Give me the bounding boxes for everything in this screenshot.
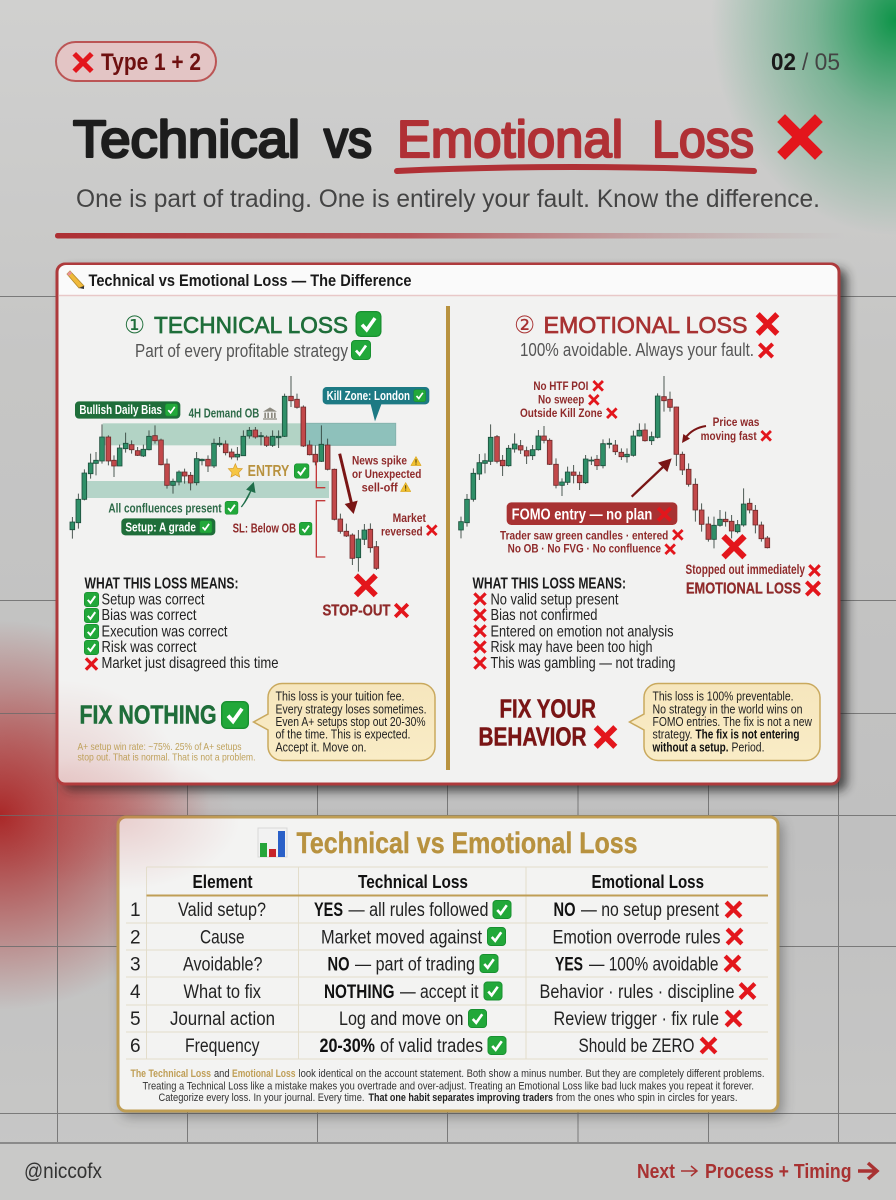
badge: Type 1 + 2: Type 1 + 2 [101, 49, 201, 76]
column: emotional loss [459, 311, 820, 760]
label: no setup checks [520, 379, 617, 420]
table note: Categorize every loss. In your journal. Every time. [158, 1092, 364, 1104]
row 6: frequency: of valid trades [380, 1036, 483, 1057]
brackets: stop distance [316, 462, 325, 557]
label: FOMO entry: FOMO entry — no plan [512, 506, 652, 523]
column: technical loss [70, 311, 437, 764]
panel: comparison table [0, 750, 783, 1117]
callout: 100% preventable: No strategy in the world wins on [652, 702, 803, 716]
callout: 100% preventable: FOMO entries. The fix is not a new [652, 715, 813, 729]
zone: kill zone london [305, 423, 396, 445]
badge: Type 1 + 2 [56, 42, 216, 81]
row 1: valid setup: YES [314, 900, 343, 921]
column divider [446, 306, 450, 770]
table note: Emotional Loss [232, 1068, 296, 1080]
title [73, 111, 819, 171]
row 2: cause [130, 927, 742, 948]
title: Technical [73, 111, 300, 169]
list: what this loss means (emotional): WHAT THIS LOSS MEANS: [472, 576, 626, 592]
row 1: valid setup: Valid setup? [178, 900, 266, 921]
table header row [192, 871, 704, 892]
list: what this loss means (technical) [84, 576, 279, 672]
label: trader description: Trader saw green candles · entered [500, 528, 668, 542]
callout: tuition fee: Accept it. Move on. [276, 740, 366, 754]
list: what this loss means (technical): Risk was correct [102, 639, 197, 656]
callout: tuition fee: Every strategy loses sometimes. [276, 702, 426, 716]
label: entry [228, 463, 309, 480]
row 1: valid setup: — no setup present [581, 900, 720, 921]
list: what this loss means (technical): Bias was correct [102, 607, 197, 624]
row 6: frequency [130, 1036, 716, 1057]
label: stopped out: EMOTIONAL LOSS [686, 580, 801, 598]
row 1: valid setup: 1 [130, 900, 141, 921]
panel heading: Technical vs Emotional Loss — The Difference [88, 271, 412, 290]
row 4: what to fix [130, 982, 755, 1003]
label: news spike: sell-off [362, 481, 398, 495]
note: win rate: A+ setup win rate: ~75%. 25% of A+ setups [78, 741, 242, 753]
subheading: Part of every profitable strategy [135, 341, 348, 361]
row 5: journal action: Journal action [170, 1009, 275, 1030]
candlesticks [459, 376, 770, 548]
label: news spike: News spike [352, 454, 407, 468]
zone: lower entry area [87, 481, 329, 498]
row 4: what to fix: 4 [130, 982, 141, 1003]
row 5: journal action: 5 [130, 1009, 141, 1030]
subheading: 100% avoidable. Always your fault. [520, 340, 754, 360]
callout: tuition fee: This loss is your tuition fee. [276, 690, 404, 704]
verdict: fix your behavior: FIX YOUR [500, 694, 596, 724]
icon: star [228, 464, 242, 477]
row 5: journal action [130, 1009, 741, 1030]
row 6: frequency: Should be ZERO [578, 1036, 694, 1057]
panel heading [59, 265, 837, 296]
table note: look identical on the account statement. Both show a minus number. But they are completely different problems. [298, 1068, 764, 1080]
label: news spike [352, 454, 421, 495]
note: win rate: stop out. That is normal. That is not a problem. [78, 752, 256, 764]
candlesticks [70, 376, 379, 572]
row 3: avoidable: YES [555, 954, 583, 976]
row 2: cause: 2 [130, 928, 141, 948]
footer: next link: Next [637, 1161, 675, 1183]
footer: next link [637, 1161, 877, 1183]
row 4: what to fix: What to fix [184, 982, 261, 1003]
callout: tuition fee: Even A+ setups stop out 20-30% [276, 715, 426, 729]
list: what this loss means (emotional) [472, 576, 676, 672]
row 3: avoidable: Avoidable? [183, 954, 262, 976]
row 3: avoidable: 3 [130, 954, 141, 976]
row 2: cause: Emotion overrode rules [552, 928, 720, 948]
page counter [771, 49, 840, 76]
row 6: frequency: Frequency [185, 1036, 260, 1057]
row 5: journal action: Review trigger · fix rule [554, 1009, 719, 1030]
subtitle: One is part of trading. One is entirely your fault. Know the difference. [76, 185, 820, 213]
chart: technical loss candlesticks [70, 376, 437, 595]
icon: pencil [67, 271, 84, 289]
heading: technical loss: TECHNICAL LOSS [154, 312, 348, 338]
label: trader description: No OB · No FVG · No confluence [508, 542, 661, 556]
header rule [55, 233, 845, 238]
list: what this loss means (emotional): This was gambling — not trading [490, 655, 676, 672]
row 4: what to fix: — accept it [400, 982, 479, 1003]
label: price was moving fast [701, 415, 771, 443]
list: what this loss means (technical): Market just disagreed this time [102, 655, 279, 672]
table header row: Element [192, 871, 252, 892]
label: stopped out [686, 562, 820, 598]
title: vs [324, 111, 372, 169]
callout: tuition fee: of the time. This is expected. [276, 728, 410, 742]
row 6: frequency: 20-30% [320, 1036, 375, 1057]
arrow: sell-off [340, 454, 358, 514]
list: what this loss means (emotional): Bias not confirmed [490, 607, 598, 624]
arrow: FOMO to entry [632, 458, 672, 497]
list: what this loss means (technical): Setup was correct [102, 592, 205, 608]
table header row: Technical Loss [358, 871, 468, 892]
row 5: journal action: Log and move on [339, 1009, 464, 1030]
callout: tuition fee [254, 684, 435, 760]
chart: emotional loss candlesticks [459, 376, 771, 557]
page counter: / 05 [802, 49, 840, 76]
icon: cross [74, 54, 92, 71]
row 1: valid setup: NO [554, 900, 576, 921]
note: win rate [78, 741, 256, 764]
label: all confluences present: All confluences present [108, 501, 222, 515]
row 4: what to fix: NOTHING [324, 982, 394, 1003]
row 6: frequency: 6 [130, 1036, 141, 1057]
table note: from the ones who spin in circles for years. [556, 1092, 738, 1104]
row 3: avoidable: — part of trading [355, 954, 475, 976]
verdict: fix nothing: FIX NOTHING [80, 700, 216, 730]
row 2: cause: Market moved against [321, 928, 483, 948]
table note: The Technical Loss [130, 1068, 211, 1080]
table grid [126, 867, 768, 1059]
callout: 100% preventable: The fix is not entering [696, 728, 800, 742]
footer: handle: @niccofx [24, 1160, 102, 1183]
arrow: fast move [682, 426, 706, 443]
arrow: to entry zone [241, 483, 255, 507]
label: kill zone london [323, 387, 429, 421]
label: no setup checks: No HTF POI [533, 379, 588, 393]
table note: That one habit separates improving traders [368, 1092, 553, 1104]
label: stopped out: Stopped out immediately [686, 562, 805, 577]
table note [130, 1068, 764, 1104]
title: Emotional [397, 111, 623, 169]
heading: emotional loss: EMOTIONAL LOSS [544, 312, 748, 338]
row 3: avoidable: NO [328, 954, 350, 976]
row 2: cause: Cause [200, 928, 244, 948]
zone: 4H demand order block [103, 423, 305, 445]
verdict: fix your behavior [478, 694, 615, 752]
label: setup A grade: Setup: A grade [125, 520, 196, 534]
list: what this loss means (technical): Execution was correct [102, 624, 228, 640]
panel: difference [0, 264, 847, 880]
icon: stop-out cross [356, 575, 376, 595]
callout: 100% preventable: strategy. [652, 728, 692, 742]
label: stop-out: STOP-OUT [322, 602, 391, 620]
list: what this loss means (emotional): Entered on emotion not analysis [490, 624, 674, 640]
label: market reversed: Market [393, 511, 426, 525]
icon: stopped-out cross [723, 536, 744, 557]
table header row: Emotional Loss [592, 871, 704, 892]
callout: 100% preventable: This loss is 100% preventable. [652, 690, 794, 704]
row 4: what to fix: Behavior · rules · discipline [540, 982, 734, 1003]
label: price was moving fast: Price was [713, 415, 759, 429]
label: no setup checks: No sweep [538, 393, 585, 407]
label: kill zone london: Kill Zone: London [327, 389, 410, 403]
label: news spike: or Unexpected [352, 467, 421, 481]
label: price was moving fast: moving fast [701, 429, 757, 443]
list: what this loss means (emotional): Risk may have been too high [490, 639, 652, 656]
label: stop loss below OB: SL: Below OB [233, 522, 296, 536]
row 3: avoidable [130, 954, 740, 976]
arrow: next [858, 1163, 877, 1179]
table note: Treating a Technical Loss like a mistake makes you overtrade and over-adjust. Treating an Emotional Loss like bad luck makes you repeat it forever. [142, 1080, 754, 1092]
label: no setup checks: Outside Kill Zone [520, 406, 602, 420]
label: market reversed [381, 511, 437, 538]
row 1: valid setup: — all rules followed [348, 900, 488, 921]
callout: 100% preventable: Period. [732, 740, 764, 754]
title: Loss [652, 111, 754, 169]
table heading: Technical vs Emotional Loss [296, 827, 638, 860]
icon: bank [263, 407, 277, 420]
row 3: avoidable: — 100% avoidable [589, 954, 718, 976]
table note: and [214, 1068, 230, 1080]
footer: next link: Process + Timing [705, 1161, 852, 1183]
callout: 100% preventable: without a setup. [652, 740, 728, 754]
verdict: fix your behavior: BEHAVIOR [478, 722, 587, 752]
label: entry: ENTRY [248, 463, 290, 480]
heading: emotional loss: ② [514, 311, 535, 339]
icon: bar chart [258, 828, 287, 857]
row 1: valid setup [130, 900, 741, 921]
label: trader description [500, 528, 683, 556]
list: what this loss means (emotional): No valid setup present [490, 592, 619, 608]
list: what this loss means (technical): WHAT THIS LOSS MEANS: [84, 576, 238, 592]
label: bullish daily bias: Bullish Daily Bias [79, 403, 162, 417]
label: market reversed: reversed [381, 524, 423, 538]
heading: technical loss: ① [124, 311, 145, 339]
label: 4H demand OB: 4H Demand OB [189, 407, 259, 421]
icon: title cross [781, 118, 819, 156]
callout: 100% preventable [630, 684, 820, 760]
page counter: 02 [771, 49, 796, 76]
